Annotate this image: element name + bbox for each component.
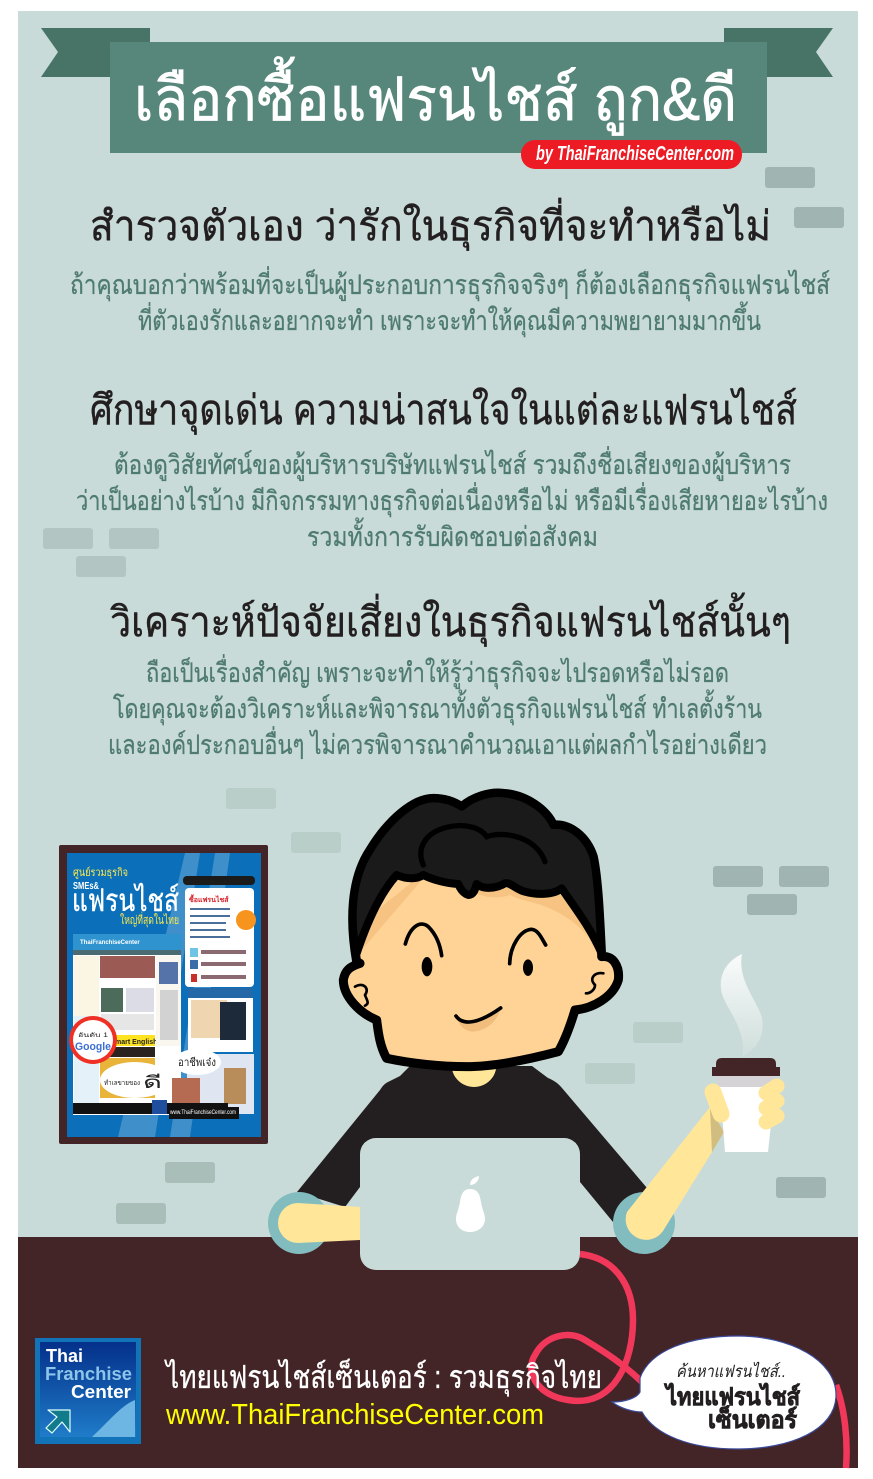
poster google badge: Google (75, 1041, 111, 1053)
banner ribbon right (724, 28, 833, 77)
body 2: รวมทั้งการรับผิดชอบต่อสังคม (307, 517, 598, 552)
poster website screenshot (73, 934, 181, 1115)
panel: brown desk footer (18, 1237, 858, 1468)
bubble bold text: เซ็นเตอร์ (708, 1405, 797, 1434)
ears detail (355, 973, 603, 1006)
left hand (278, 1203, 360, 1243)
eyebrows and eyes (405, 924, 546, 976)
laptop pear logo (456, 1176, 485, 1232)
speech bubble (612, 1336, 836, 1449)
steam (721, 954, 763, 1057)
body 3 (108, 654, 767, 760)
footer url: www.ThaiFranchiseCenter.com (165, 1399, 544, 1431)
cup lid (712, 1058, 780, 1076)
poster speech bubbles: ดี (143, 1073, 162, 1092)
logo text: Thai (46, 1346, 83, 1366)
banner ribbon left (41, 28, 150, 77)
right arm (626, 1107, 712, 1240)
left arm cuff (268, 1192, 330, 1254)
bubble bold text (663, 1382, 800, 1434)
poster website screenshot: mart English (115, 1039, 157, 1046)
arm shadow (710, 1108, 724, 1152)
coffee cup (712, 954, 780, 1152)
poster right column: ซื้อแฟรนไชส์ (189, 893, 229, 904)
face (343, 793, 619, 1067)
poster google badge: อันดับ 1 (78, 1032, 109, 1039)
poster right column (172, 888, 256, 1114)
logo text: Franchise (45, 1364, 132, 1384)
body 2 (76, 446, 828, 552)
mouth (456, 1008, 501, 1032)
poster google badge (69, 1016, 117, 1064)
logo (35, 1338, 141, 1444)
footer text (164, 1358, 602, 1431)
logo arrow (46, 1410, 70, 1433)
poster headline (72, 866, 179, 928)
logo text: Center (71, 1382, 131, 1402)
body 3: ถือเป็นเรื่องสำคัญ เพราะจะทำให้รู้ว่าธุรกิจจะไปรอดหรือไม่รอด (146, 654, 729, 690)
poster black tag (183, 876, 255, 885)
sweater body (297, 1066, 647, 1222)
hair (353, 793, 602, 953)
body 1 (70, 266, 830, 338)
wall bricks (43, 167, 844, 1224)
poster website screenshot: ThaiFranchiseCenter (80, 940, 140, 946)
byline pill (521, 140, 742, 169)
cup body (720, 1087, 775, 1152)
banner main (110, 42, 767, 153)
title banner (41, 28, 833, 169)
logo text (45, 1346, 132, 1402)
hair curl line (421, 826, 545, 865)
poster bottom strip (73, 1100, 239, 1119)
poster frame (59, 845, 268, 1144)
heading 1: สำรวจตัวเอง ว่ารักในธุรกิจที่จะทำหรือไม่ (90, 198, 771, 251)
poster headline: ศูนย์รวมธุรกิจ (73, 866, 128, 879)
poster bottom strip: www.ThaiFranchiseCenter.com (169, 1110, 236, 1116)
bubble small text: ค้นหาแฟรนไชส์.. (676, 1361, 786, 1381)
character (268, 793, 724, 1270)
cup sleeve (717, 1076, 775, 1087)
title: เลือกซื้อแฟรนไชส์ ถูก&ดี (134, 56, 737, 136)
heading 3: วิเคราะห์ปัจจัยเสี่ยงในธุรกิจแฟรนไชส์นั้นๆ (110, 592, 791, 647)
poster speech bubbles: ทำเลขายของ (104, 1079, 140, 1087)
poster blue background (67, 853, 261, 1137)
red cable (531, 1254, 847, 1468)
poster headline: SMEs& (73, 881, 99, 892)
byline pill: by ThaiFranchiseCenter.com (536, 143, 734, 165)
poster headline: ใหญ่ที่สุดในไทย (120, 911, 179, 928)
head (343, 793, 619, 1067)
collar (452, 1069, 496, 1087)
poster headline: แฟรนไชส์ (72, 883, 179, 918)
section 1 (70, 198, 830, 338)
poster speech bubbles: อาชีพเจ๋ง (178, 1056, 216, 1069)
hand fingers (713, 1086, 777, 1122)
section 2 (76, 387, 828, 552)
poster speech bubbles (100, 1049, 221, 1098)
logo wing (92, 1400, 135, 1437)
poster on wall (59, 845, 268, 1144)
footer thai line: ไทยแฟรนไชส์เซ็นเตอร์ : รวมธุรกิจไทย (164, 1358, 602, 1397)
forehead shadow (362, 877, 598, 957)
laptop (360, 1138, 580, 1270)
right arm cuff (613, 1192, 675, 1254)
bubble bold text: ไทยแฟรนไชส์ (663, 1382, 800, 1411)
panel: background wall (18, 11, 858, 1237)
section 3 (108, 592, 791, 760)
